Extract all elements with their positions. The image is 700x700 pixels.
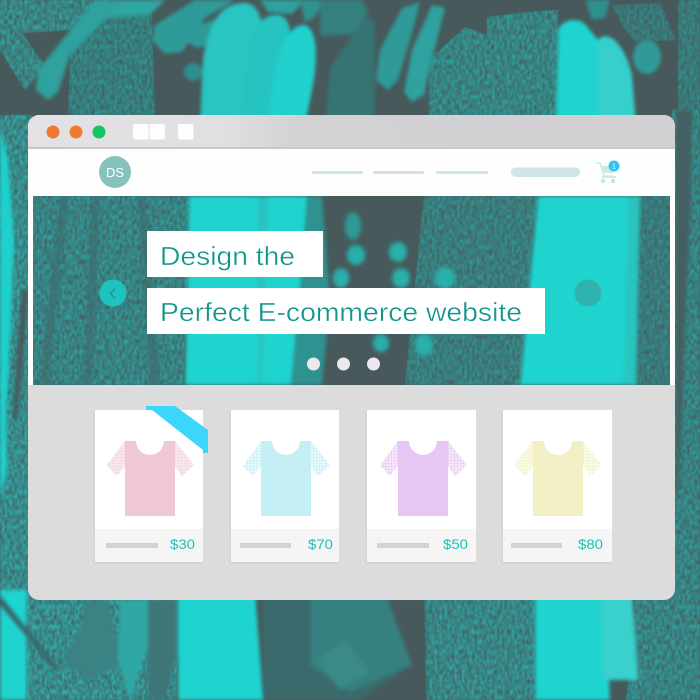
name placeholder (377, 543, 429, 548)
browser window (28, 115, 675, 600)
window control: minimise (70, 126, 82, 138)
t-shirt (106, 427, 194, 516)
top hangers (152, 0, 235, 54)
heading line 1: Design the (160, 241, 295, 271)
logo badge: DS (106, 165, 124, 180)
right edge (676, 110, 692, 500)
t-shirt (243, 427, 330, 516)
heading line 1 (147, 231, 323, 277)
product card: purple t-shirt (366, 410, 476, 564)
top centre dark garment (320, 0, 368, 36)
navigation bar (28, 149, 675, 385)
title bar (28, 115, 675, 149)
name placeholder (240, 543, 291, 548)
t-shirt (380, 427, 467, 516)
hero bokeh buttons (333, 212, 455, 356)
name placeholder (511, 543, 562, 548)
top right hangers (376, 2, 420, 90)
t-shirt (514, 427, 601, 516)
price: $80 (578, 536, 603, 552)
heading line 2: Perfect E-commerce website (160, 297, 522, 327)
bottom garments (0, 590, 27, 700)
carousel arrow: next (574, 280, 602, 306)
carousel arrow: previous (100, 280, 126, 306)
toolbar buttons (133, 124, 194, 140)
price: $30 (170, 536, 195, 552)
window control: close (46, 126, 60, 138)
heading line 2 (147, 288, 545, 334)
product card: yellow t-shirt (502, 410, 612, 564)
carousel pagination dots (307, 358, 380, 370)
name placeholder (106, 543, 158, 548)
icon: shopping cart (596, 160, 620, 183)
hero knit photo (30, 196, 672, 385)
product card: pink t-shirt (94, 410, 203, 564)
search field (511, 168, 580, 177)
window body (28, 115, 675, 600)
top right bright garments (556, 20, 598, 125)
hero smooth garments (40, 196, 640, 385)
window control: maximise (92, 126, 106, 138)
icon: shopping cart: 1 (612, 164, 616, 170)
hero banner (30, 196, 672, 385)
logo badge (99, 156, 131, 188)
product card: blue t-shirt (230, 410, 339, 564)
top centre pale sweaters (200, 3, 261, 125)
price: $70 (308, 536, 333, 552)
sale ribbon (146, 406, 208, 453)
navigation links (312, 171, 488, 174)
left edge (0, 125, 14, 500)
price: $50 (443, 536, 468, 552)
top left hanger (36, 0, 125, 100)
